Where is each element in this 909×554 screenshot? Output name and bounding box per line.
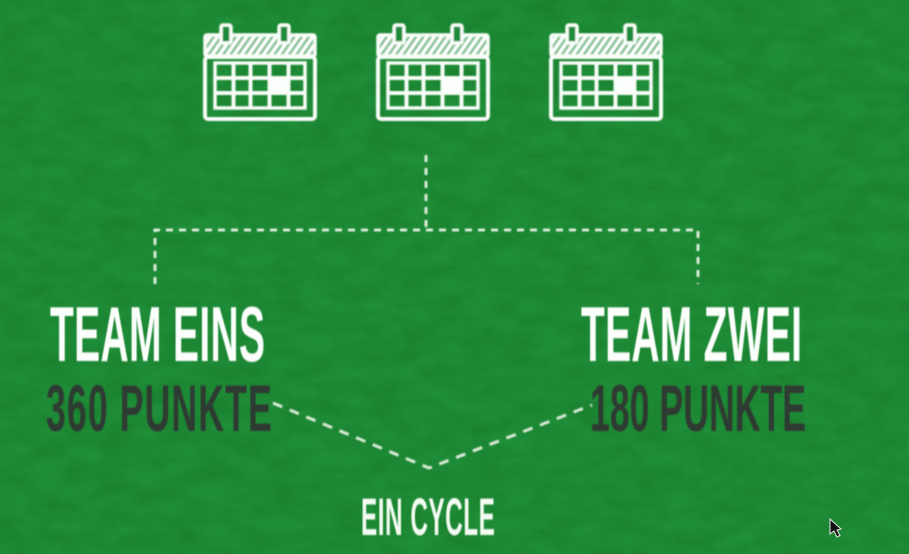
text: 360 punkte: 360 PUNKTE — [46, 373, 272, 446]
icon: mouse cursor — [830, 519, 841, 537]
icon: calendar 1 — [205, 25, 315, 119]
label: ein cycle: EIN CYCLE — [361, 487, 495, 547]
heading: team zwei: TEAM ZWEI — [581, 291, 802, 379]
text: 180 punkte: 180 PUNKTE — [590, 373, 806, 446]
icon: calendar 2 — [378, 25, 488, 119]
connector: points to cycle — [273, 403, 592, 468]
heading: team eins: TEAM EINS — [50, 291, 265, 379]
connector: calendars to teams — [155, 155, 698, 284]
icon: calendar 3 — [551, 25, 661, 119]
